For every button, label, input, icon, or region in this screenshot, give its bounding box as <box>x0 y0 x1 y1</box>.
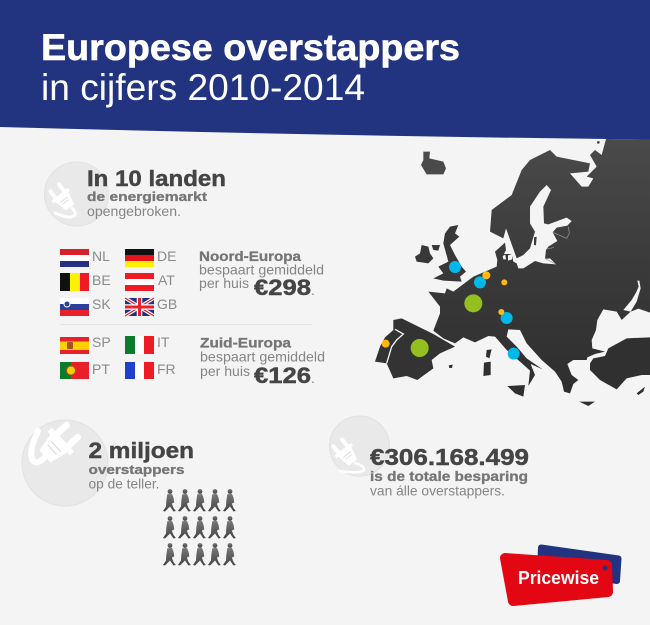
flags: Noord-Europa <box>60 248 177 316</box>
title <box>41 27 460 108</box>
map: Danish straits <box>503 254 512 261</box>
pictogram: walking people <box>163 489 236 566</box>
block: 10 countries <box>44 162 226 226</box>
flag: BE: BE <box>92 272 111 288</box>
text: Noord-Europa savings: . <box>311 282 315 298</box>
flag: FR: FR <box>157 361 176 377</box>
flag: SP: SP <box>92 334 111 350</box>
text: Zuid-Europa savings: . <box>311 370 315 386</box>
map: green markers <box>411 294 482 357</box>
block: 2 miljoen <box>22 417 236 566</box>
text: Noord-Europa savings <box>199 249 324 300</box>
icon: plug in small circle <box>328 416 390 476</box>
subheading: de energiemarkt: de energiemarkt <box>87 189 208 204</box>
flag: DE: DE <box>157 248 176 264</box>
heading: total amount: €306.168.499 <box>370 444 529 470</box>
map: yellow markers <box>382 271 507 348</box>
text: Zuid-Europa savings <box>200 336 325 388</box>
header banner <box>0 0 650 140</box>
logo: red card <box>505 558 608 601</box>
map: Novaya island <box>597 141 600 144</box>
text: Zuid-Europa savings: €126 <box>254 363 311 388</box>
map: Iceland <box>421 152 446 174</box>
divider <box>60 324 312 326</box>
map: Baltic islands <box>534 237 537 245</box>
text: van alle overstappers: van álle overstappers. <box>370 482 505 498</box>
heading: 2 miljoen: 2 miljoen <box>88 438 194 463</box>
map: United Kingdom <box>433 225 466 282</box>
flag: GB: GB <box>157 296 177 312</box>
text: Zuid-Europa savings: Zuid-Europa <box>200 336 292 350</box>
map: Azov sea and rivers <box>623 281 641 312</box>
block: total savings <box>328 416 529 498</box>
map: Gulf details <box>545 227 569 264</box>
flag: AT: AT <box>158 272 175 288</box>
map: Mediterranean islands <box>449 349 645 406</box>
map: blue markers <box>449 261 520 360</box>
flag: IT: IT <box>157 334 170 350</box>
logo: hole <box>602 566 608 570</box>
icon: plug in large circle <box>22 417 108 506</box>
flag: PT: PT <box>92 361 110 377</box>
text: op de teller: op de teller. <box>88 476 160 492</box>
subheading: is de totale besparing: is de totale besparing <box>370 469 528 484</box>
flag: NL: NL <box>92 248 110 264</box>
title: Europese overstappers <box>41 27 460 68</box>
text: Zuid-Europa savings: per huis <box>200 363 250 379</box>
title: in cijfers 2010-2014 <box>41 67 365 108</box>
subheading: overstappers: overstappers <box>88 462 184 477</box>
text: Zuid-Europa savings: bespaart gemiddeld <box>200 348 325 364</box>
text: opengebroken: opengebroken. <box>87 204 181 219</box>
map of Europe <box>375 139 650 406</box>
icon: plug in circle <box>44 162 108 226</box>
map: Ireland <box>415 245 440 263</box>
flags: Zuid-Europa <box>60 334 176 379</box>
text: Noord-Europa savings: bespaart gemiddeld <box>199 262 324 278</box>
logo: wordmark: Pricewise <box>518 568 599 588</box>
map: Portugal border <box>387 329 403 363</box>
flag: SK: SK <box>92 296 111 312</box>
map: Iberia <box>375 318 455 380</box>
logo: blue card <box>540 548 618 581</box>
logo: Pricewise <box>505 548 618 601</box>
text: Noord-Europa savings: €298 <box>254 275 311 300</box>
map: mainland <box>428 139 650 393</box>
map: Turkey <box>590 337 650 389</box>
heading: In 10 landen: In 10 landen <box>87 166 226 191</box>
text: Noord-Europa savings: per huis <box>199 275 249 291</box>
text: Noord-Europa savings: Noord-Europa <box>199 249 302 264</box>
